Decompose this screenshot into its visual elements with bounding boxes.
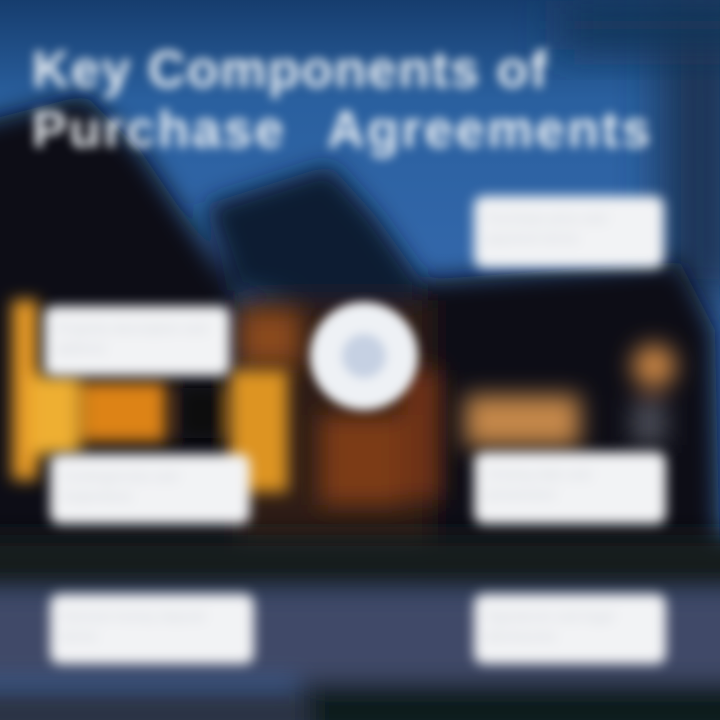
card: upper left <box>44 306 230 376</box>
card: middle left <box>50 454 250 524</box>
right lit windows <box>465 344 676 447</box>
title <box>27 41 655 166</box>
central wall glow <box>240 310 440 505</box>
card: top right: Purchase price and payment terms <box>486 210 607 246</box>
house silhouette and roofs <box>0 95 720 570</box>
title: Key Components of <box>32 41 549 99</box>
central circle icon <box>310 302 418 410</box>
card: bottom right <box>474 594 666 664</box>
lawn, road and foreground <box>0 535 720 720</box>
card: bottom right: Signatures and legal disclosures <box>486 608 614 644</box>
card: bottom left: Earnest money deposit terms <box>62 608 205 644</box>
card: middle left: Contingencies and inspections <box>62 468 178 504</box>
card: upper left: Property description and address <box>56 320 208 356</box>
card: middle right: Closing date and possession <box>486 466 591 502</box>
card: middle right <box>474 452 666 524</box>
card: top right <box>474 196 664 268</box>
title: Purchase Agreements <box>32 101 653 159</box>
left lit windows <box>12 300 288 492</box>
card: bottom left <box>50 594 254 664</box>
